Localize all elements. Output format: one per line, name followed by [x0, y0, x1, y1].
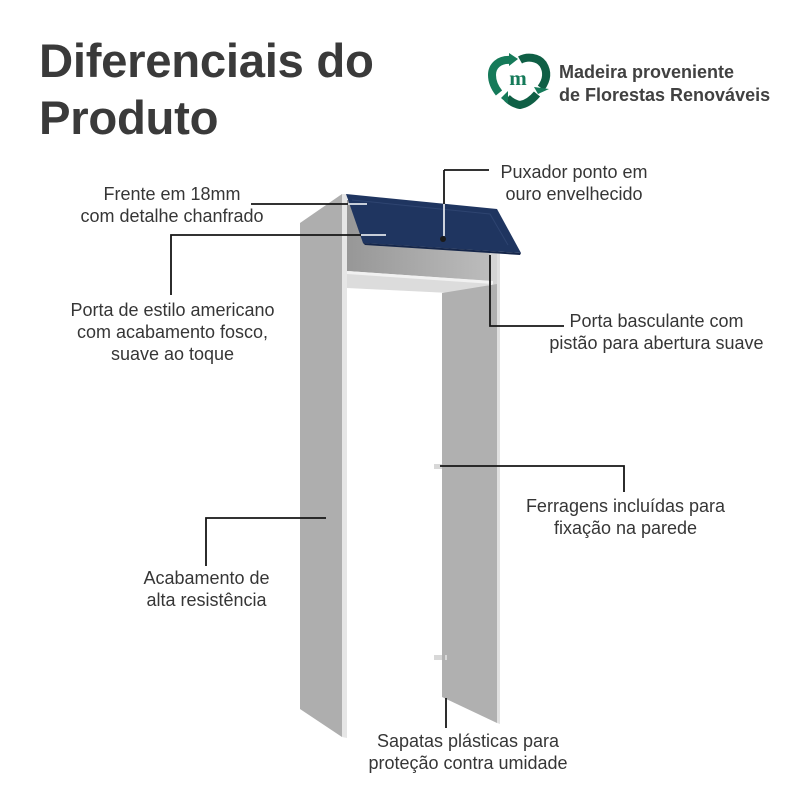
label: porta estilo americano: Porta de estilo americano [70, 300, 275, 320]
label: porta basculante [549, 311, 764, 353]
label: puxador [500, 162, 648, 204]
label: acabamento: Acabamento de [143, 568, 270, 588]
logo caption [559, 62, 770, 105]
label: porta basculante: pistão para abertura suave [549, 333, 764, 353]
logo caption: Madeira proveniente [559, 62, 734, 82]
label: porta basculante: Porta basculante com [569, 311, 744, 331]
label: ferragens: fixação na parede [554, 518, 697, 538]
callout lines [171, 170, 624, 728]
label: puxador: ouro envelhecido [505, 184, 643, 204]
label: ferragens [526, 496, 725, 538]
label: porta estilo americano: com acabamento fosco, [77, 322, 268, 342]
logo caption: de Florestas Renováveis [559, 85, 770, 105]
label: frente 18mm: Frente em 18mm [103, 184, 241, 204]
label: acabamento: alta resistência [146, 590, 267, 610]
title [39, 35, 374, 145]
label: porta estilo americano: suave ao toque [111, 344, 234, 364]
label: sapatas: Sapatas plásticas para [377, 731, 559, 751]
label: frente 18mm: com detalhe chanfrado [80, 206, 264, 226]
label: frente 18mm [80, 184, 264, 226]
label: porta estilo americano [70, 300, 275, 364]
label: sapatas [368, 731, 568, 773]
title: Diferenciais do [39, 35, 374, 88]
title: Produto [39, 92, 218, 145]
label: ferragens: Ferragens incluídas para [526, 496, 725, 516]
label: acabamento [143, 568, 270, 610]
label: puxador: Puxador ponto em [500, 162, 648, 182]
icon: recycled wood heart logo: m [509, 66, 527, 90]
label: sapatas: proteção contra umidade [368, 753, 568, 773]
